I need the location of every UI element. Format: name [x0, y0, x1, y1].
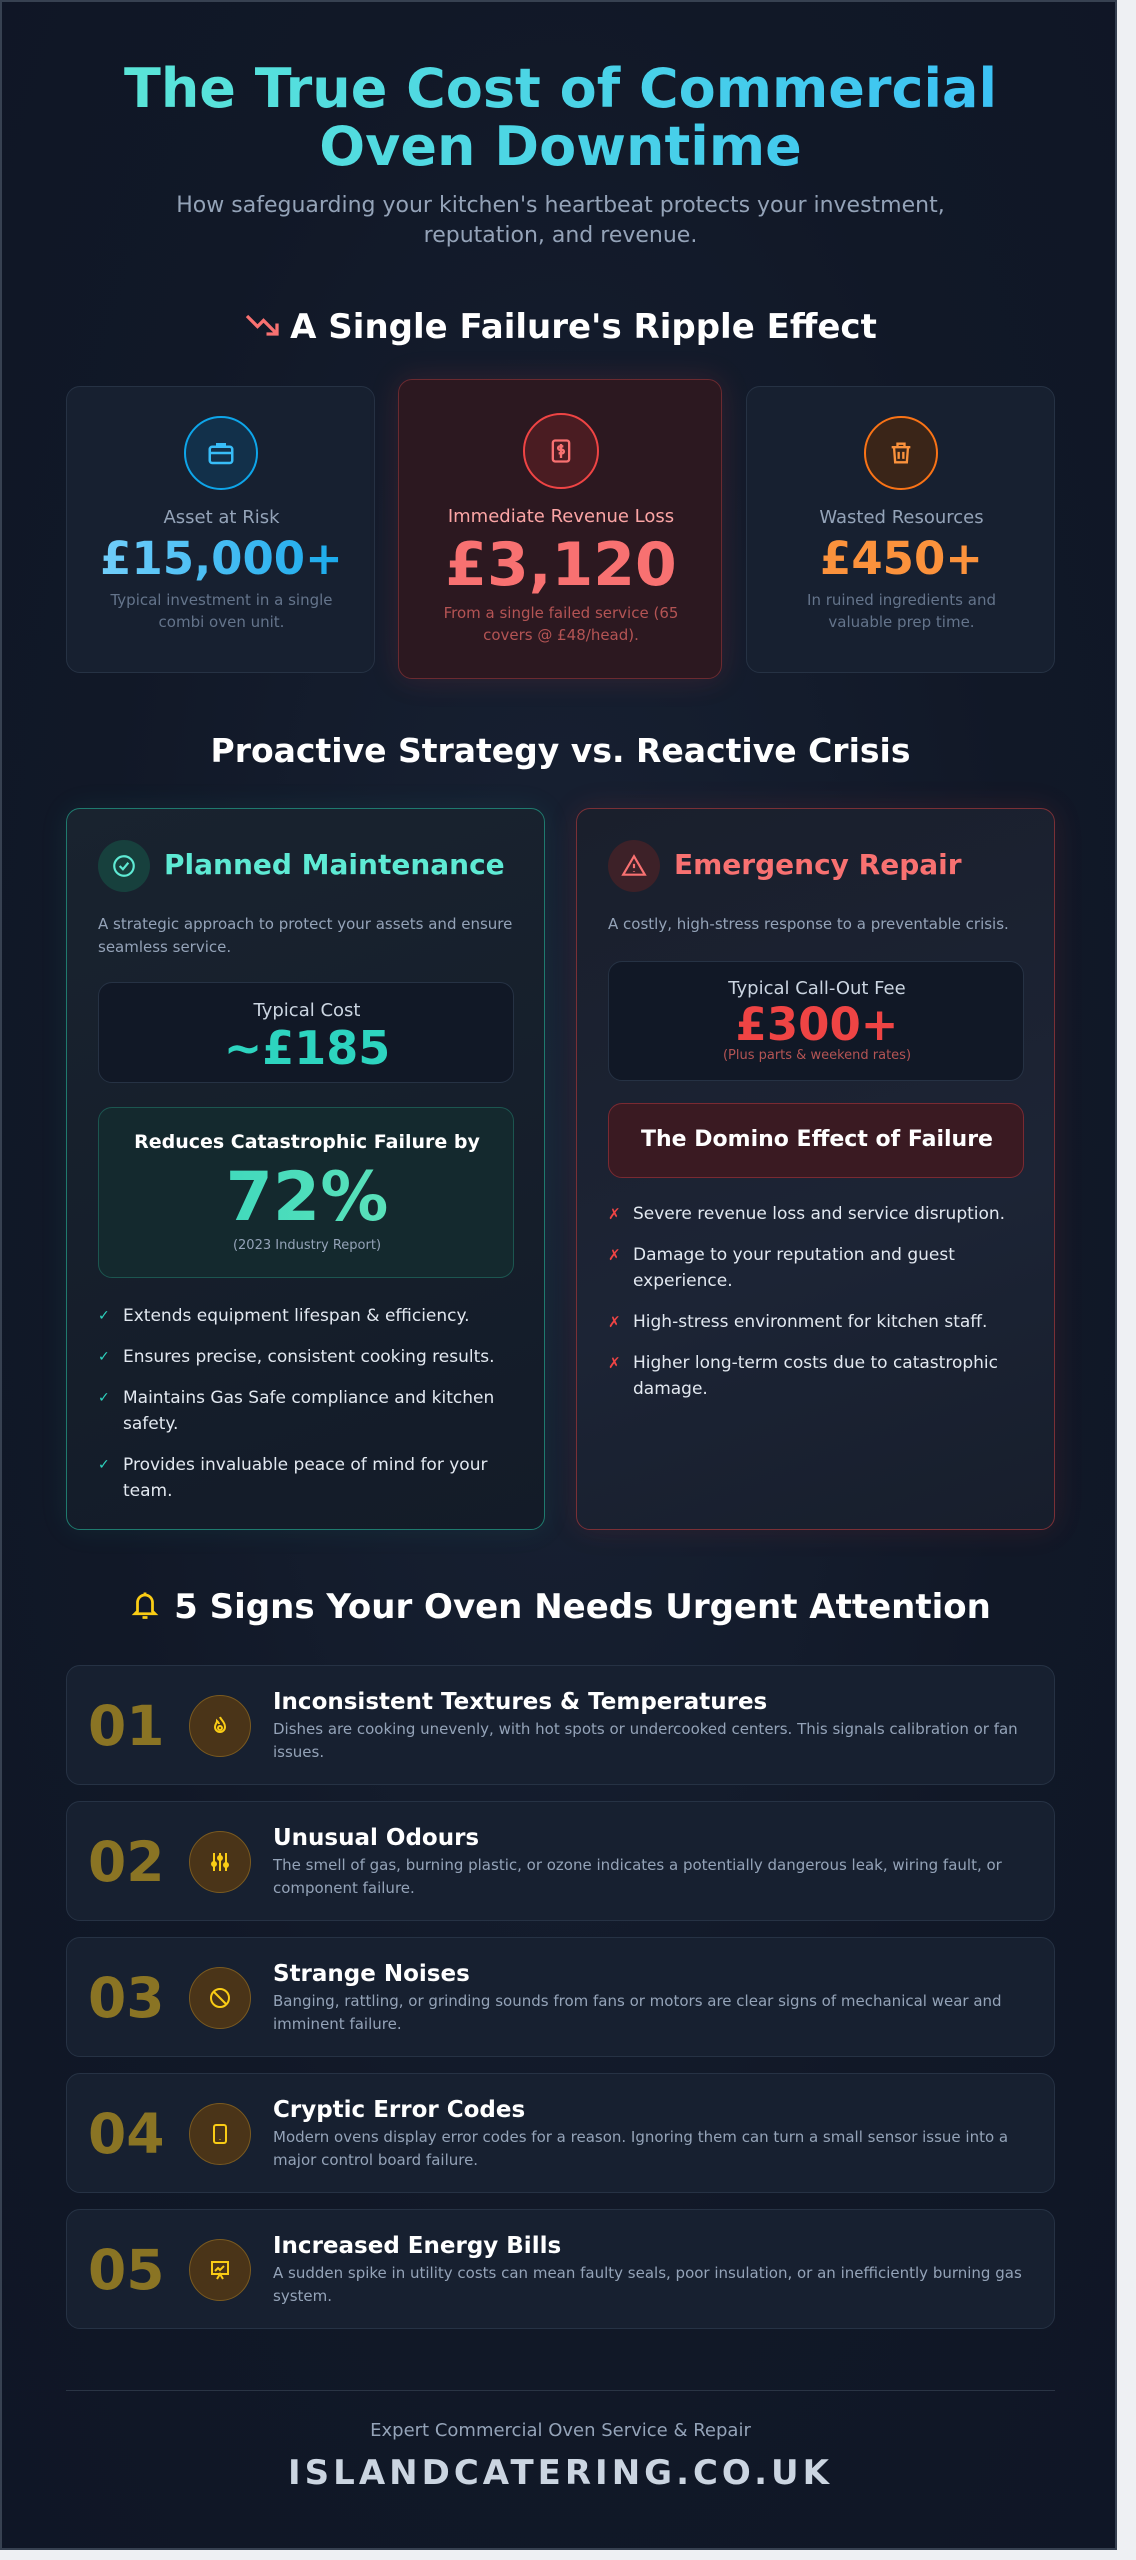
card: wasted resources: Wasted Resources — [819, 507, 984, 528]
consequences list: High-stress environment for kitchen staff. — [633, 1312, 987, 1332]
title: Oven Downtime — [319, 115, 802, 178]
sign 01: Dishes are cooking unevenly, with hot spots or undercooked centers. This signals calibration or fan issues. — [273, 1720, 1018, 1761]
sign 05: 05 — [88, 2238, 165, 2302]
card: asset at risk: Asset at Risk — [163, 507, 280, 528]
benefits list: Extends equipment lifespan & efficiency. — [123, 1306, 470, 1326]
cost box: ~£185 — [224, 1021, 390, 1075]
call-out fee box: Typical Call-Out Fee — [728, 978, 906, 999]
consequences list: Severe revenue loss and service disruption. — [633, 1204, 1005, 1224]
sign 04: Modern ovens display error codes for a reason. Ignoring them can turn a small sensor issue into a major control board failure. — [273, 2128, 1008, 2169]
sign 02: Unusual Odours — [273, 1825, 479, 1851]
sign 03: Banging, rattling, or grinding sounds from fans or motors are clear signs of mechanical wear and imminent failure. — [273, 1992, 1002, 2033]
sign 02: The smell of gas, burning plastic, or ozone indicates a potentially dangerous leak, wiring fault, or component failure. — [273, 1856, 1002, 1897]
footer: ISLANDCATERING.CO.UK — [288, 2453, 833, 2493]
stat box: 72%: Reduces Catastrophic Failure by — [134, 1131, 480, 1153]
benefits list: ✓ — [98, 1349, 110, 1365]
call-out fee box: (Plus parts & weekend rates) — [723, 1048, 911, 1063]
call-out fee box: £300+ — [736, 998, 898, 1051]
sign 04: Cryptic Error Codes — [273, 2097, 525, 2123]
sign 03 — [66, 1937, 1055, 2057]
consequences list — [608, 1204, 1005, 1399]
icon: flame — [189, 1695, 251, 1757]
subtitle: How safeguarding your kitchen's heartbeat protects your investment, reputation, and revenue. — [176, 193, 945, 248]
panel: emergency repair — [576, 808, 1055, 1530]
benefits list: ✓ — [98, 1457, 110, 1473]
stat box: 72%: 72% — [226, 1158, 388, 1237]
domino heading box: The Domino Effect of Failure — [641, 1127, 993, 1152]
icon: tablet — [189, 2103, 251, 2165]
card: revenue loss: From a single failed service (65 covers @ £48/head). — [444, 604, 678, 644]
icon: no sound — [189, 1967, 251, 2029]
card: revenue loss: £3,120 — [445, 530, 677, 600]
cost box — [98, 982, 514, 1083]
consequences list: Higher long-term costs due to catastrophic damage. — [633, 1353, 998, 1399]
benefits list: ✓ — [98, 1390, 110, 1406]
card: asset at risk: £15,000+ — [100, 532, 343, 585]
icon: trash — [864, 416, 938, 490]
sign 03: 03 — [88, 1966, 165, 2030]
heading: ripple effect: A Single Failure's Ripple Effect — [290, 307, 877, 347]
cost box: Typical Cost — [254, 1000, 360, 1021]
benefits list: Ensures precise, consistent cooking results. — [123, 1347, 495, 1367]
panel: emergency repair: A costly, high-stress response to a preventable crisis. — [608, 915, 1009, 933]
sign 05: A sudden spike in utility costs can mean faulty seals, poor insulation, or an inefficiently burning gas system. — [273, 2264, 1022, 2305]
consequences list: Damage to your reputation and guest experience. — [633, 1245, 955, 1291]
benefits list: Maintains Gas Safe compliance and kitchen safety. — [123, 1388, 494, 1434]
icon: warning — [608, 840, 660, 892]
benefits list — [98, 1306, 495, 1501]
sign 01: 01 — [88, 1694, 165, 1758]
benefits list: ✓ — [98, 1308, 110, 1324]
icon: check — [98, 840, 150, 892]
title — [2, 60, 1119, 176]
domino heading box — [608, 1103, 1024, 1178]
consequences list: ✗ — [608, 1354, 621, 1372]
icon: sliders — [189, 1831, 251, 1893]
panel: planned maintenance — [66, 808, 545, 1530]
sign 04: 04 — [88, 2102, 165, 2166]
title: The True Cost of Commercial — [124, 57, 997, 120]
benefits list: Provides invaluable peace of mind for your team. — [123, 1455, 487, 1501]
card: asset at risk: Typical investment in a single combi oven unit. — [110, 591, 333, 631]
sign 02 — [66, 1801, 1055, 1921]
panel: emergency repair: Emergency Repair — [674, 848, 962, 881]
footer: Expert Commercial Oven Service & Repair — [370, 2420, 751, 2441]
consequences list: ✗ — [608, 1313, 621, 1331]
icon: briefcase — [184, 416, 258, 490]
card: wasted resources: £450+ — [820, 532, 983, 585]
card: asset at risk — [66, 386, 375, 673]
heading: proactive vs reactive: Proactive Strategy vs. Reactive Crisis — [211, 731, 910, 770]
call-out fee box — [608, 961, 1024, 1081]
sign 05: Increased Energy Bills — [273, 2233, 561, 2259]
icon: money — [523, 413, 599, 489]
heading: 5 signs: 5 Signs Your Oven Needs Urgent Attention — [174, 1587, 991, 1627]
card: revenue loss — [398, 379, 722, 679]
card: wasted resources: In ruined ingredients and valuable prep time. — [807, 591, 996, 631]
footer — [288, 2420, 833, 2493]
sign 03: Strange Noises — [273, 1961, 470, 1987]
panel: planned maintenance: A strategic approach to protect your assets and ensure seamless service. — [98, 915, 512, 956]
consequences list: ✗ — [608, 1205, 621, 1223]
card: revenue loss: Immediate Revenue Loss — [448, 506, 674, 527]
sign 04 — [66, 2073, 1055, 2193]
sign 05 — [66, 2209, 1055, 2329]
card: wasted resources — [746, 386, 1055, 673]
panel: planned maintenance: Planned Maintenance — [164, 848, 505, 881]
stat box: 72% — [98, 1107, 514, 1278]
sign 01: Inconsistent Textures & Temperatures — [273, 1689, 767, 1715]
sign 02: 02 — [88, 1830, 165, 1894]
icon: chart — [189, 2239, 251, 2301]
sign 01 — [66, 1665, 1055, 1785]
consequences list: ✗ — [608, 1246, 621, 1264]
stat box: 72%: (2023 Industry Report) — [233, 1238, 381, 1253]
